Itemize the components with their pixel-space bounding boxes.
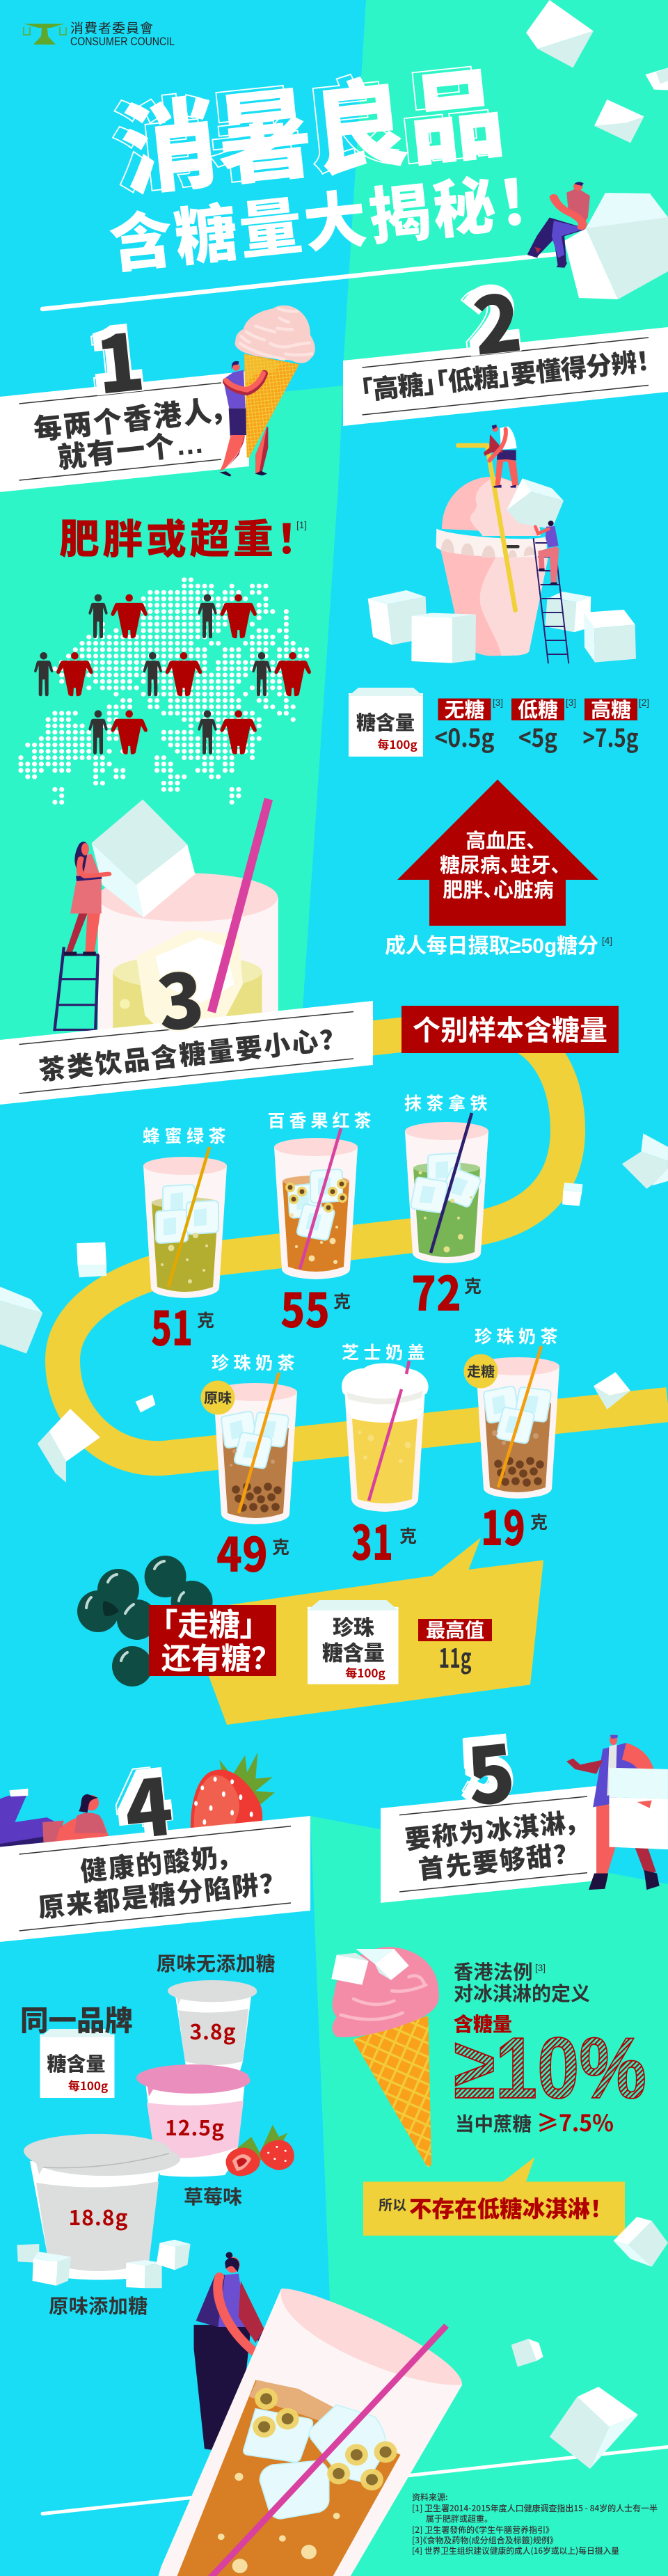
- ladder: [534, 538, 568, 663]
- banner 4: [0, 1816, 310, 1942]
- drink: cheese foam tea: 31: [351, 1505, 393, 1574]
- sugar thresholds: [3]: [566, 697, 576, 708]
- sugar thresholds: [3]: [493, 697, 503, 708]
- cube behind ladder: [545, 592, 591, 632]
- red up arrow with health risks: 高血压、: [466, 830, 536, 853]
- number 4: 4: [119, 1745, 177, 1862]
- sugar card: pearls: 珍珠: [333, 1617, 374, 1640]
- daily sugar intake note: [4]: [602, 935, 612, 946]
- number 2: 2: [468, 261, 526, 378]
- yogurt: strawberry: [136, 2064, 250, 2208]
- cube front left: [411, 613, 476, 663]
- drink: passion fruit black tea: 克: [333, 1293, 351, 1312]
- background: green top right: [343, 0, 668, 369]
- drink: passion fruit black tea: [267, 1112, 376, 1341]
- badge: 走糖: 走糖: [467, 1363, 495, 1380]
- drink: honey green tea: 51: [151, 1290, 193, 1359]
- man with straw: [484, 425, 518, 488]
- title outline: 消暑良品: 消暑良品: [106, 56, 500, 206]
- red up arrow with health risks: [397, 780, 598, 926]
- footnotes: sources: [1] 卫生署2014-2015年度人口健康调查指出15 - 84岁的人士有一半: [412, 2502, 658, 2514]
- woman and ladder with cube: [54, 841, 109, 1031]
- callout: no low sugar ice cream: 不存在低糖冰淇淋！: [409, 2196, 601, 2222]
- drink: cheese foam tea: 芝士奶盖: [342, 1343, 429, 1363]
- sugar thresholds: >7.5g: [583, 718, 639, 754]
- drink: matcha latte: 抹茶拿铁: [404, 1093, 492, 1114]
- max value: 11g: [438, 1637, 472, 1675]
- ice cream cone with man: [219, 306, 315, 477]
- strawberries: [225, 2125, 294, 2176]
- sugar card: yogurt: [40, 2029, 114, 2098]
- tapioca pearls: [77, 1556, 213, 1686]
- logo: Consumer Council: 消費者委員會: [70, 18, 154, 37]
- banner 3: 茶类饮品含糖量要小心？: [38, 1026, 337, 1086]
- sugar thresholds: 低糖: [518, 699, 558, 722]
- banner 4: 健康的酸奶，: [79, 1842, 235, 1888]
- ice cubes in giant glass: [244, 2405, 385, 2519]
- sugar card: 糖含量 每100g: [349, 688, 423, 757]
- sugar cube: left edge: [0, 1287, 42, 1354]
- woman climbing: [535, 521, 559, 585]
- section 3 large glass: [98, 873, 278, 1047]
- badge: 原味: 原味: [204, 1391, 232, 1406]
- title: 消暑良品: 消暑良品: [116, 58, 509, 208]
- tag: 走糖还有糖: [149, 1605, 276, 1676]
- woman behind giant glass: [194, 2252, 265, 2451]
- footnotes: sources: 属于肥胖或超重。: [426, 2513, 488, 2524]
- number 5 white backing: 5: [458, 1707, 516, 1824]
- sugar card: yogurt: 糖含量: [47, 2053, 106, 2075]
- number 1: 1: [90, 300, 149, 417]
- sugar thresholds: [434, 697, 649, 754]
- heading: 肥胖或超重: [1]: [296, 520, 307, 530]
- banner 1: [0, 371, 249, 492]
- yogurt: strawberry: 草莓味: [184, 2186, 242, 2208]
- ice cream legal definition: [3]: [535, 1963, 546, 1973]
- sugar cube: small lower: [511, 2339, 543, 2366]
- drink: pearl milk tea, no added sugar: [463, 1327, 562, 1559]
- man holding sugar cube: [566, 1735, 668, 1890]
- drink: cheese foam tea: [342, 1343, 429, 1574]
- drink: honey green tea: [143, 1127, 230, 1359]
- footnotes: sources: 资料来源:: [412, 2491, 448, 2503]
- drink: pearl milk tea, original: [200, 1354, 299, 1586]
- sugar card: 糖含量 每100g: 糖含量: [356, 711, 415, 734]
- cube on cup: [507, 478, 564, 529]
- footnotes: sources: [4] 世界卫生组织建议健康的成人(16岁或以上)每日摄入量: [412, 2545, 619, 2557]
- banner 5: 首先要够甜？: [417, 1840, 569, 1884]
- drink: pearl milk tea, no added sugar: 珍珠奶茶: [475, 1327, 562, 1347]
- drink: pearl milk tea, original: 49: [216, 1517, 268, 1586]
- banner 2: [343, 327, 668, 426]
- sugar card: yogurt: 每100g: [68, 2076, 108, 2094]
- sugar cube: right edge: [622, 1134, 668, 1189]
- sugar card: 糖含量 每100g: 每100g: [377, 735, 418, 752]
- number 5 offset outline: 5: [452, 1704, 511, 1821]
- person sitting on cube: [527, 182, 590, 268]
- banner 4: 原来都是糖分陷阱？: [37, 1870, 276, 1924]
- sugar cube: small lower left: [136, 1395, 155, 1412]
- cube front right: [584, 610, 636, 663]
- speech bubble: pearl sugar: [209, 1538, 543, 1725]
- sugar cube: path lower right: [594, 1372, 630, 1409]
- yellow winding path: [63, 1025, 668, 1458]
- ice cream legal definition: [454, 1961, 646, 2138]
- heading tag: individual samples: [401, 1006, 619, 1053]
- number 2 white backing: 2: [463, 257, 522, 374]
- footnotes: sources: [3]《食物及药物(成分组合及标籤)规例》: [412, 2534, 554, 2546]
- logo: Consumer Council: [24, 18, 175, 48]
- sugar cube: small right edge: [645, 68, 668, 90]
- sugar thresholds: <5g: [518, 718, 557, 754]
- section 3 straw: [212, 799, 269, 1012]
- number 3: 3: [152, 940, 209, 1053]
- section 3 tilted cube: [92, 800, 195, 917]
- red up arrow with health risks: 糖尿病、蛀牙、: [440, 854, 561, 877]
- sugar thresholds: 无糖: [444, 699, 485, 722]
- footnotes: sources: [2] 卫生署發佈的《学生午膳营养指引》: [412, 2524, 550, 2536]
- number 5: 5: [461, 1712, 520, 1828]
- drink: passion fruit black tea: 55: [280, 1272, 330, 1341]
- ice cream cone: pink: [331, 1947, 439, 2167]
- red up arrow with health risks: 肥胖、心脏病: [443, 878, 554, 902]
- divider line under title: [42, 254, 557, 309]
- heading: 同一品牌: 同一品牌: [20, 2005, 133, 2037]
- number 4 white backing: 4: [115, 1741, 173, 1858]
- yogurt: plain no added sugar: [157, 1953, 276, 2071]
- strawberry: [191, 1752, 275, 1844]
- sugar cube: lower right large: [550, 2387, 638, 2469]
- badge: 走糖: [463, 1354, 498, 1388]
- banner 1: 就有一个…: [56, 427, 207, 474]
- footnotes: sources: [412, 2491, 658, 2557]
- drink: pearl milk tea, no added sugar: 19: [481, 1490, 525, 1559]
- drink: honey green tea: 蜂蜜绿茶: [143, 1127, 230, 1146]
- background: green middle left: [0, 386, 343, 1086]
- drink: matcha latte: 72: [411, 1256, 461, 1325]
- daily sugar intake note: 成人每日摄取≥50g糖分: [385, 935, 598, 958]
- hatched figure ≥10%: ≥10%: [454, 2021, 646, 2117]
- banner 1: 每两个香港人，: [32, 393, 230, 446]
- banner 3: [0, 1001, 373, 1105]
- heading tag: individual samples: 个别样本含糖量: [413, 1016, 607, 1046]
- sugar card: pearls: 糖含量: [322, 1642, 385, 1666]
- number 1 white backing: 1: [87, 297, 145, 413]
- max value: [418, 1619, 492, 1675]
- sugar card: pearls: 每100g: [345, 1664, 385, 1681]
- large sugar cube with person: [564, 193, 668, 299]
- yogurt: plain no added sugar: 原味无添加糖: [157, 1953, 276, 1975]
- sugar card: pearls: [308, 1600, 399, 1684]
- drink: pearl milk tea, original: 珍珠奶茶: [212, 1354, 299, 1373]
- max value: 最高值: [426, 1620, 484, 1641]
- ice cream legal definition: 对冰淇淋的定义: [454, 1983, 590, 2005]
- woman lying: [0, 1789, 109, 1850]
- drink: honey green tea: 克: [197, 1311, 214, 1331]
- sugar cube: callout right: [614, 2217, 668, 2267]
- bottom white line: [42, 2447, 668, 2514]
- sugar cube: middle right: [594, 100, 644, 143]
- sugar thresholds: 高糖: [591, 699, 631, 722]
- yogurt: strawberry: 12.5g: [165, 2111, 225, 2142]
- heading: 肥胖或超重: 肥胖或超重！: [59, 517, 300, 562]
- callout: no low sugar ice cream: 所以: [379, 2197, 406, 2213]
- tag: 走糖还有糖: 「走糖」: [161, 1607, 256, 1643]
- ice cream legal definition: ≥7.5%: [536, 2105, 614, 2138]
- people icons: one in two overweight: [34, 594, 311, 754]
- banner 5: [381, 1786, 596, 1903]
- drink: pearl milk tea, no added sugar: 克: [530, 1513, 548, 1533]
- badge: 原味: [200, 1381, 235, 1414]
- sugar cube: path small right: [562, 1183, 582, 1206]
- giant glass of passion fruit tea: [153, 2289, 462, 2576]
- dot map of Hong Kong: [21, 580, 307, 802]
- ice cream legal definition: 含糖量: [454, 2013, 512, 2035]
- label: 原味添加糖: 原味添加糖: [49, 2296, 148, 2317]
- sugar cube: path lower left: [38, 1409, 100, 1483]
- sugar cube: path small left: [77, 1242, 106, 1277]
- background: green lower right: [310, 1816, 668, 2576]
- ice cream legal definition: 香港法例: [454, 1961, 533, 1983]
- drink: cheese foam tea: 克: [399, 1527, 417, 1547]
- drink: passion fruit black tea: 百香果红茶: [267, 1112, 376, 1131]
- banner 2: 「高糖」「低糖」要懂得分辨！: [359, 347, 651, 406]
- yogurt: plain no added sugar: 3.8g: [189, 2015, 237, 2046]
- small cube left back: [368, 590, 427, 645]
- ice cream legal definition: 当中蔗糖: [455, 2113, 532, 2135]
- callout: no low sugar ice cream: [363, 2157, 625, 2236]
- drink: matcha latte: [404, 1093, 492, 1325]
- number 4 offset outline: 4: [108, 1735, 166, 1852]
- drink: matcha latte: 克: [464, 1277, 482, 1297]
- title: 含糖量大揭秘: 含糖量大揭秘！: [107, 168, 534, 281]
- sugar cube: top right large: [526, 0, 594, 68]
- banner 5: 要称为冰淇淋，: [404, 1808, 582, 1854]
- yogurt: plain with added sugar: [24, 2134, 180, 2280]
- milkshake cup illustration: [368, 425, 636, 663]
- yogurt: plain with added sugar: 18.8g: [69, 2201, 128, 2231]
- number 1 offset outline: 1: [80, 296, 138, 413]
- logo: Consumer Council: CONSUMER COUNCIL: [70, 35, 175, 48]
- tag: 走糖还有糖: 还有糖？: [161, 1643, 266, 1676]
- sugar thresholds: <0.5g: [434, 718, 494, 754]
- cubes around large yogurt: [17, 2240, 191, 2288]
- sugar thresholds: [2]: [639, 697, 649, 708]
- number 2 offset outline: 2: [455, 256, 514, 373]
- drink: pearl milk tea, original: 克: [272, 1538, 289, 1558]
